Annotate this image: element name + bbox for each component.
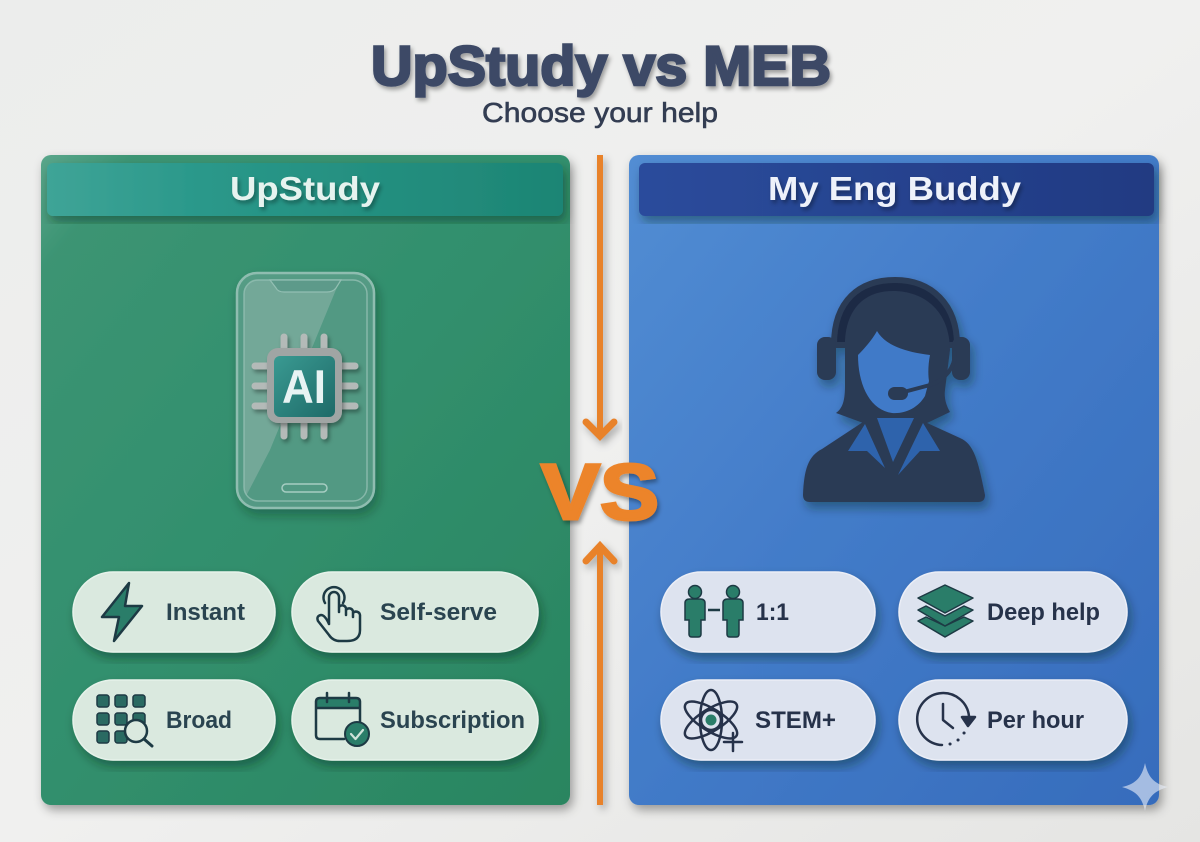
- pill: 1:1: 1:1: [756, 599, 789, 626]
- pill: Broad: Broad: [166, 707, 232, 734]
- icon: grid with magnifier: [97, 695, 152, 746]
- panel: UpStudy: [41, 155, 570, 805]
- pill: Deep help: Deep help: [987, 599, 1100, 626]
- pill: 1:1: [661, 572, 875, 652]
- pill: Per hour: [899, 680, 1127, 760]
- pill: Self-serve: Self-serve: [380, 599, 497, 626]
- header bar: My Eng Buddy: [639, 163, 1154, 216]
- icon: lightning bolt: [102, 583, 142, 641]
- panel: My Eng Buddy: [629, 155, 1159, 805]
- icon: two people connected: [685, 586, 743, 637]
- pill: Broad: [73, 680, 275, 760]
- pill: Subscription: Subscription: [380, 707, 525, 734]
- pill: Subscription: [292, 680, 538, 760]
- pill: Instant: Instant: [166, 599, 245, 626]
- title: UpStudy vs MEB: UpStudy vs MEB: [371, 34, 831, 97]
- arrow: top pointing down: [586, 155, 614, 436]
- panel background: [629, 155, 1159, 805]
- header bar: My Eng Buddy: My Eng Buddy: [768, 170, 1022, 207]
- title block: [371, 34, 831, 128]
- panel background: [41, 155, 570, 805]
- pill: Per hour: Per hour: [987, 707, 1084, 734]
- arrow: bottom pointing up: [586, 546, 614, 805]
- pill: STEM+: [661, 680, 875, 760]
- icon: stacked layers: [918, 585, 973, 637]
- icon: glass phone with AI chip: [237, 273, 374, 508]
- icon: sparkle watermark: [1122, 763, 1168, 811]
- VS label: VS: [541, 447, 659, 536]
- icon: tapping hand: [317, 587, 360, 641]
- icon: atom with plus: [680, 690, 742, 751]
- icon: glass phone with AI chip: AI: [282, 360, 326, 413]
- pill: Instant: [73, 572, 275, 652]
- subtitle: Choose your help: [482, 97, 718, 128]
- header bar: UpStudy: [47, 163, 563, 216]
- header bar: UpStudy: UpStudy: [230, 170, 381, 207]
- pill: STEM+: STEM+: [755, 707, 836, 734]
- pill: Self-serve: [292, 572, 538, 652]
- icon: clock with arrow: [917, 693, 975, 745]
- pill: Deep help: [899, 572, 1127, 652]
- icon: support agent with headset: [803, 280, 985, 502]
- icon: calendar with check: [316, 693, 369, 746]
